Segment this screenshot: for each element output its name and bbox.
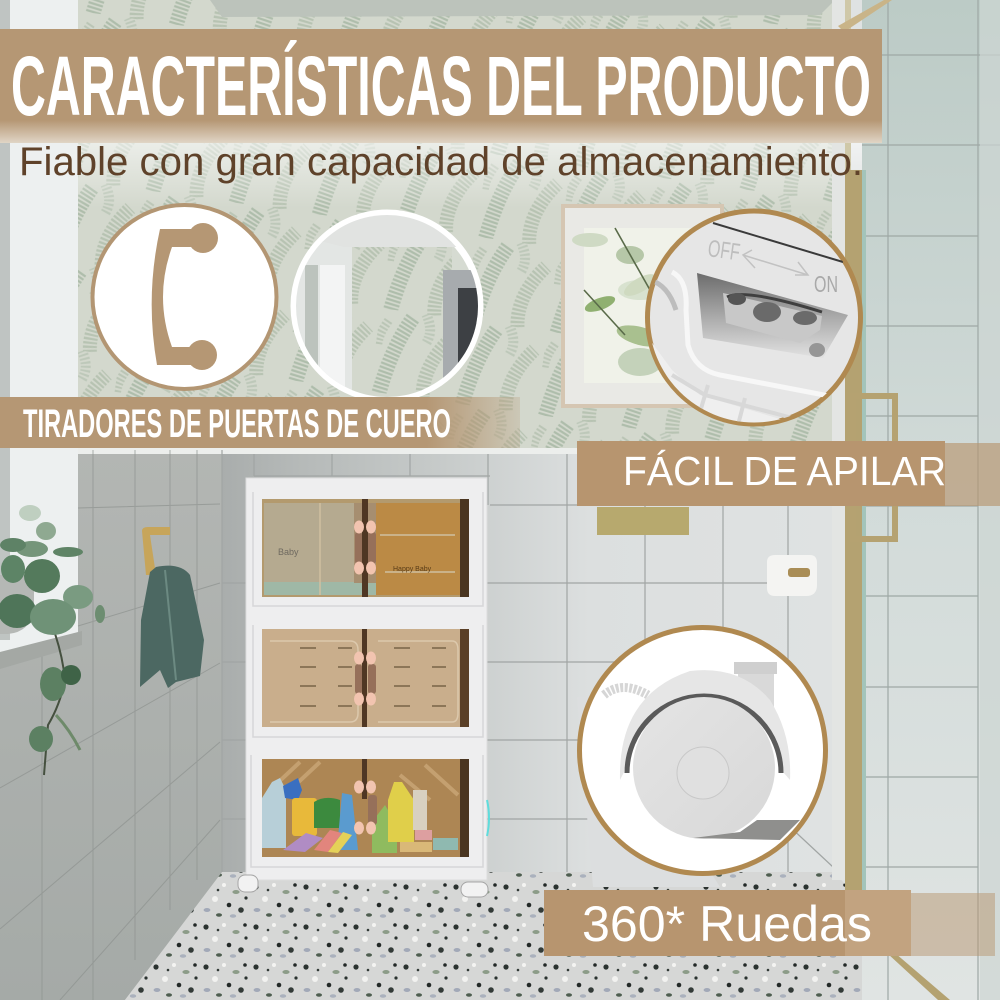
drawer: bottom	[262, 759, 469, 857]
product: storage cabinet	[238, 478, 489, 897]
drawer: top: Baby	[278, 547, 299, 557]
label: leather door handles	[0, 397, 520, 448]
drawer: top	[262, 499, 469, 597]
drawer: middle	[262, 629, 469, 727]
label: 360 wheels: 360* Ruedas	[582, 896, 872, 952]
icon: leather door handle circle	[92, 205, 276, 389]
icon: stacking latch circle: OFF	[706, 235, 742, 266]
casters	[238, 875, 488, 897]
icon: stacking latch circle: ON	[814, 271, 838, 297]
icon: stacking latch circle	[648, 211, 860, 425]
toilet paper holder	[767, 555, 817, 596]
flush plate	[597, 507, 689, 535]
shower door handle	[853, 396, 895, 539]
label: 360 wheels	[544, 890, 995, 956]
icon: 360 wheel circle	[580, 628, 826, 874]
title banner	[0, 29, 882, 143]
towel and hook	[140, 527, 204, 688]
drawer: top: Happy Baby	[393, 566, 432, 573]
framed picture	[563, 206, 722, 406]
subtitle: Fiable con gran capacidad de almacenamiento.	[19, 140, 863, 184]
round mirror	[290, 210, 490, 407]
label: leather door handles: TIRADORES DE PUERTAS DE CUERO	[23, 402, 451, 446]
toilet	[577, 697, 720, 887]
label: easy to stack	[577, 441, 1000, 506]
potted plant	[0, 505, 105, 775]
label: easy to stack: FÁCIL DE APILAR	[623, 448, 946, 494]
